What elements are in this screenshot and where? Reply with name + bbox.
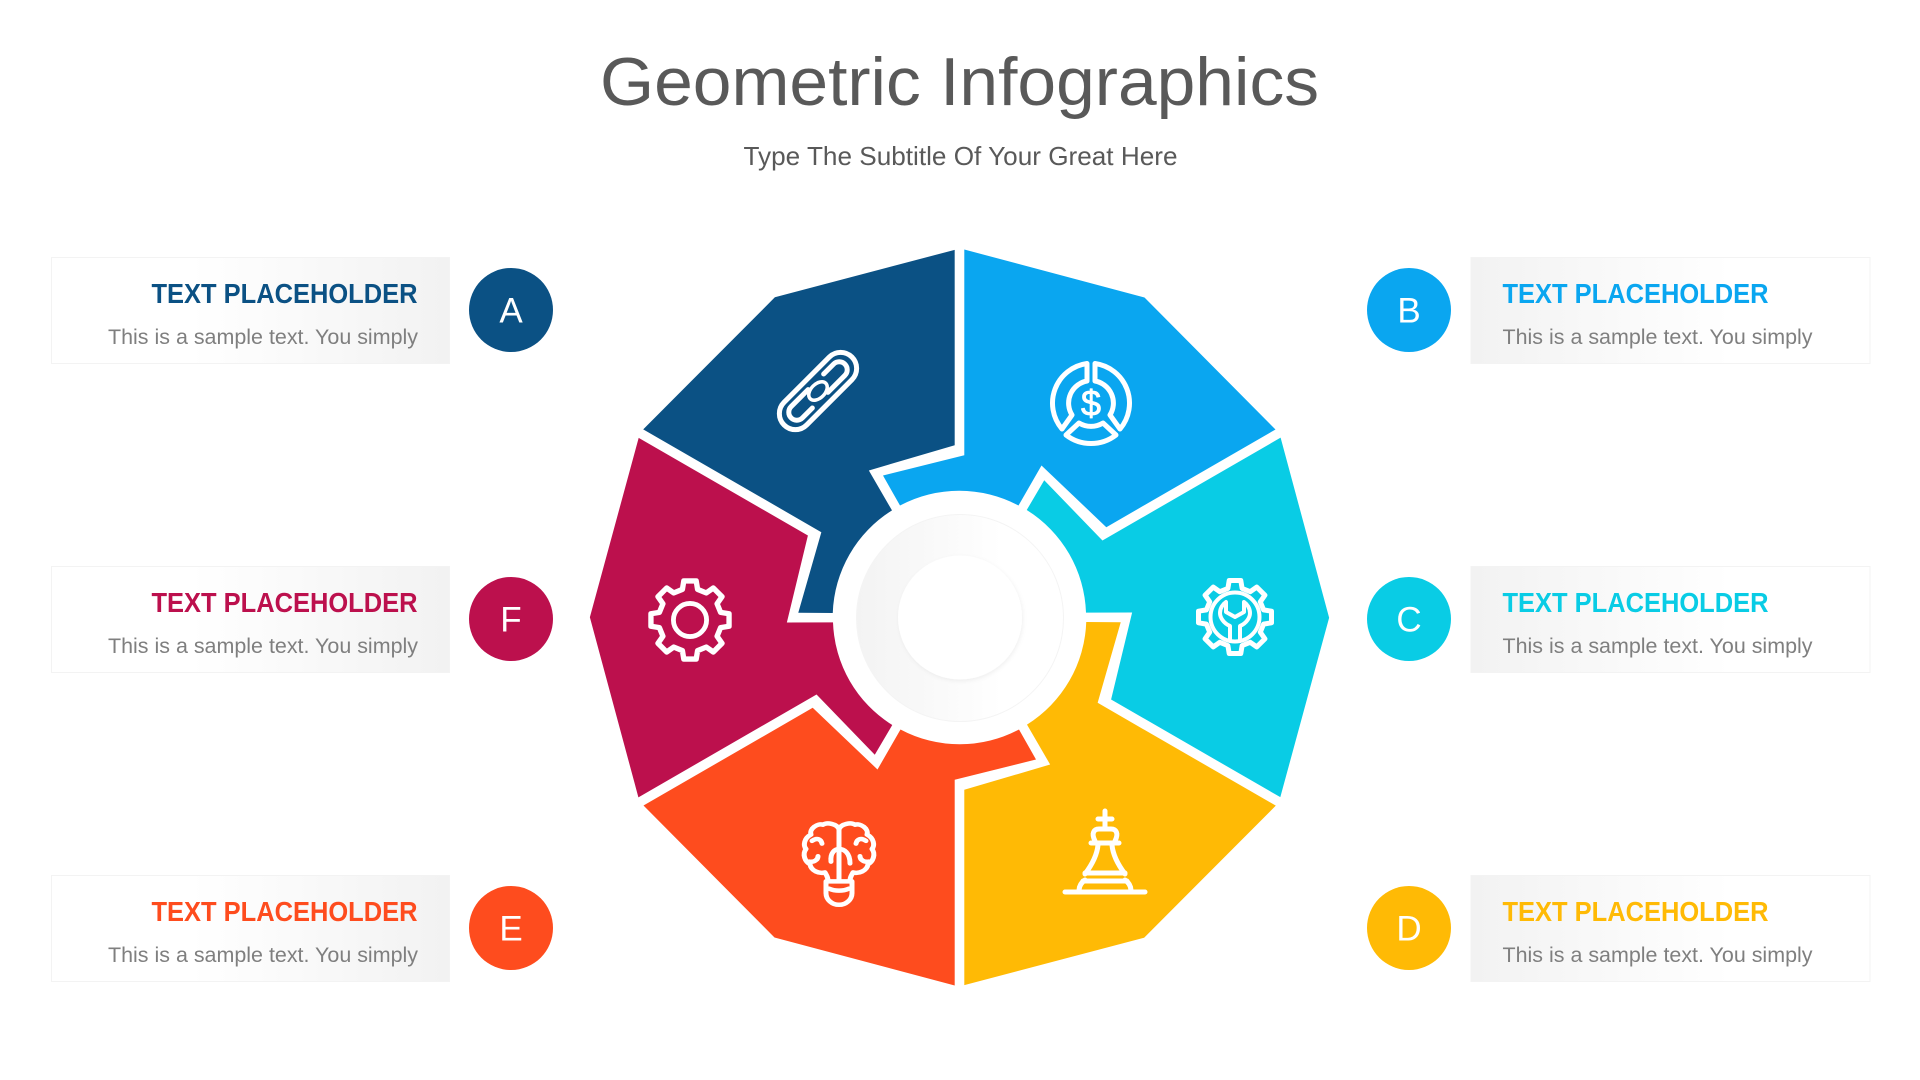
icon: gear [651,581,729,659]
text F: This is a sample text. You simply [108,635,419,658]
badge F [469,577,553,661]
text E: This is a sample text. You simply [108,944,419,967]
heading E: TEXT PLACEHOLDER [152,896,418,927]
heading C: TEXT PLACEHOLDER [1502,587,1768,618]
panel: E [52,876,553,982]
subtitle: Type The Subtitle Of Your Great Here [744,141,1178,171]
badge E: E [499,910,523,949]
text C: This is a sample text. You simply [1502,635,1813,658]
segment C: cyan [999,367,1436,846]
icon: chess king [1065,811,1145,892]
panel: A [52,258,553,364]
segment E: orange [644,708,1036,986]
text B: This is a sample text. You simply [1502,326,1813,349]
badge B: B [1397,292,1421,331]
center medallion [856,514,1064,722]
panel: D [1367,876,1870,982]
segment D: amber [880,596,1316,1075]
badge A [469,268,553,352]
badge A: A [499,292,523,331]
badge C [1367,577,1451,661]
card B [1471,258,1870,364]
badge B [1367,268,1451,352]
heading A: TEXT PLACEHOLDER [152,278,418,309]
badge D [1367,886,1451,970]
title: Geometric Infographics [600,44,1319,120]
icon: dollar donut chart [1052,364,1130,444]
card D [1471,876,1870,982]
text D: This is a sample text. You simply [1502,944,1813,967]
card C [1471,566,1870,672]
card E [52,876,450,982]
heading B: TEXT PLACEHOLDER [1502,278,1768,309]
panel: B [1367,258,1870,364]
segment A: dark blue [603,160,1039,639]
icon: chain link [773,346,863,436]
card F [52,566,450,672]
wheel of six segments [483,160,1436,1075]
heading D: TEXT PLACEHOLDER [1502,896,1768,927]
icon: gear with wrench [1198,580,1272,654]
badge C: C [1396,601,1422,640]
segment B: blue [883,250,1276,527]
badge F: F [500,601,522,640]
segment F: crimson [483,389,920,868]
badge D: D [1396,910,1422,949]
icon: brain light bulb [804,823,874,905]
card A [52,258,450,364]
badge E [469,886,553,970]
heading F: TEXT PLACEHOLDER [152,587,418,618]
text A: This is a sample text. You simply [108,326,419,349]
panel: F [52,566,553,672]
icon: dollar donut chart: $ [1081,382,1101,424]
panel: C [1367,566,1870,672]
